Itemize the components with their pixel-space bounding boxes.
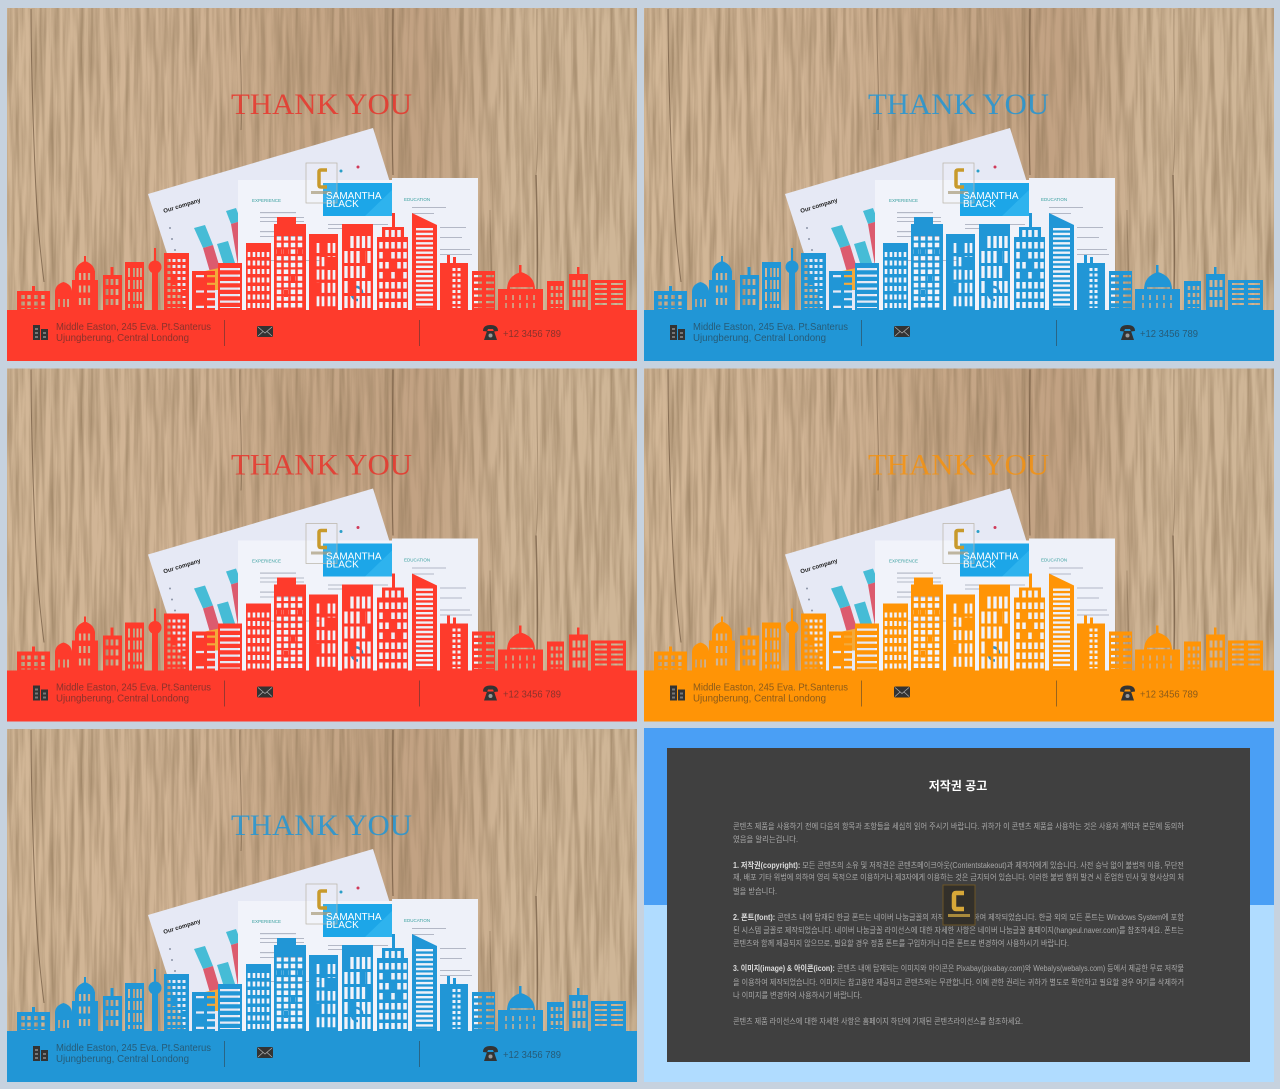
title: THANK YOU (231, 809, 412, 842)
address (693, 321, 848, 344)
document text: SAMANTHA (326, 552, 382, 562)
dark notice panel (667, 748, 1250, 1062)
address: Ujungberung, Central Londong (56, 1053, 189, 1065)
phone number: +12 3456 789 (503, 1049, 561, 1061)
divider (1056, 680, 1057, 706)
document text: EXPERIENCE (889, 198, 918, 203)
slide 6: copyright notice (644, 728, 1274, 1082)
document text: EXPERIENCE (252, 919, 281, 924)
city skyline and footer band (7, 213, 637, 361)
title: THANK YOU (231, 448, 412, 482)
icon: envelope (257, 326, 273, 337)
icon: envelope (894, 326, 910, 337)
paragraph 1: copyright: 벌을 받습니다. (733, 886, 777, 896)
divider (224, 1041, 225, 1067)
divider (419, 1041, 420, 1067)
document text: BLACK (963, 560, 996, 570)
document text: Our company (163, 198, 202, 215)
document text (163, 912, 430, 936)
paragraph 2: font: 된 시스템 글꼴로 제작되었습니다. 네이버 나눔글꼴 라이선스에 대한 자세한 사항은 네이버 나눔글꼴 홈페이지(hangeul.naver.com)를 참조하세요. 폰트는 (733, 925, 1184, 935)
background top blue (644, 728, 1274, 905)
divider (419, 680, 420, 706)
paragraph 1: copyright: 1. 저작권(copyright): 모든 콘텐츠의 소유 및 저작권은 콘텐츠메이크아웃(Contentstakeout)과 제작자에게 있습니다. 사전 승낙 없이 불법적 이용, 무단전 (733, 860, 1184, 870)
background bottom light blue (644, 905, 1274, 1082)
address: Middle Easton, 245 Eva. Pt.Santerus (56, 1042, 211, 1054)
intro paragraph (733, 821, 1185, 844)
document text (800, 552, 1067, 575)
document text: BLACK (326, 560, 359, 570)
address (56, 682, 211, 704)
title: THANK YOU (231, 88, 412, 121)
document text (800, 191, 1067, 215)
city skyline and footer band (7, 934, 637, 1082)
notice heading: 저작권 공고 (929, 778, 987, 793)
paragraph 3: image and icon: 나 이미지를 변경하여 사용하시기 바랍니다. (733, 990, 862, 1000)
document text: Our company (800, 198, 839, 215)
phone number: +12 3456 789 (1140, 328, 1198, 340)
document text: EDUCATION (404, 197, 430, 202)
document text: BLACK (326, 199, 359, 210)
icon: building (33, 1046, 48, 1061)
address: Middle Easton, 245 Eva. Pt.Santerus (693, 321, 848, 333)
slide 3: red thank you (7, 368, 637, 722)
document text (163, 191, 430, 215)
paragraph 2: font (733, 912, 1185, 948)
slide 1: red thank you (7, 8, 637, 361)
address: Ujungberung, Central Londong (693, 692, 826, 704)
phone number: +12 3456 789 (1140, 688, 1198, 700)
document text: EDUCATION (404, 918, 430, 923)
divider (861, 320, 862, 346)
document text: EXPERIENCE (889, 558, 918, 564)
document text: SAMANTHA (963, 552, 1019, 562)
intro paragraph: 콘텐츠 제품을 사용하기 전에 다음의 항목과 조항들을 세심히 읽어 주시기 바랍니다. 귀하가 이 콘텐츠 제품을 사용하는 것은 사용자 계약과 본문에 동의하 (733, 821, 1185, 831)
document text: BLACK (963, 199, 996, 210)
document text: EXPERIENCE (252, 558, 281, 564)
icon: telephone (483, 1046, 498, 1061)
icon: telephone (483, 325, 498, 340)
title: THANK YOU (868, 448, 1049, 482)
icon: building (670, 686, 685, 700)
icon: envelope (257, 1047, 273, 1058)
icon: telephone (1120, 686, 1135, 700)
address (693, 682, 848, 704)
paragraph 3: image and icon: 3. 이미지(image) & 아이콘(icon): 콘텐츠 내에 탑재되는 이미지와 아이콘은 Pixabay(pixabay.com)와 Webalys(webalys.com) 등에서 제공한 무료 저작물 (733, 963, 1184, 973)
document text: BLACK (326, 920, 359, 931)
wood background with documents (644, 368, 1274, 672)
icon: telephone (483, 686, 498, 700)
document text: Our company (800, 558, 839, 575)
icon: envelope (894, 686, 910, 698)
icon: envelope (257, 686, 273, 698)
document text: EDUCATION (1041, 197, 1067, 202)
divider (1056, 320, 1057, 346)
document text: EDUCATION (1041, 558, 1067, 562)
document text: Our company (163, 558, 202, 575)
icon: building (33, 686, 48, 700)
document text: SAMANTHA (326, 912, 382, 923)
divider (224, 680, 225, 706)
divider (861, 680, 862, 706)
address: Ujungberung, Central Londong (56, 692, 189, 704)
wood background with documents (7, 8, 637, 312)
slide 5: blue thank you (7, 729, 637, 1082)
paragraph 3: image and icon (733, 963, 1184, 1000)
address: Middle Easton, 245 Eva. Pt.Santerus (693, 682, 848, 694)
icon: building (33, 325, 48, 340)
address (56, 1042, 211, 1065)
document text: EDUCATION (404, 558, 430, 562)
address (56, 321, 211, 344)
document text: Our company (163, 919, 202, 936)
address: Middle Easton, 245 Eva. Pt.Santerus (56, 321, 211, 333)
document text: SAMANTHA (963, 191, 1019, 202)
document text: SAMANTHA (326, 191, 382, 202)
wood background with documents (7, 368, 637, 672)
slide 4: orange thank you (644, 368, 1274, 722)
paragraph 2: font: 콘텐츠와 함께 제공되지 않으므로, 필요할 경우 정품 폰트를 구입하거나 다른 폰트로 변경하여 사용하시기 바랍니다. (733, 938, 1069, 948)
city skyline and footer band (644, 213, 1274, 361)
slide 2: blue thank you (644, 8, 1274, 361)
intro paragraph: 였음을 알리는겁니다. (733, 834, 798, 844)
city skyline and footer band (644, 574, 1274, 722)
address: Ujungberung, Central Londong (56, 332, 189, 344)
city skyline and footer band (7, 574, 637, 722)
wood background with documents (644, 8, 1274, 312)
paragraph 2: font: 2. 폰트(font): 콘텐츠 내에 탑재된 한글 폰트는 네이버 나눔글꼴의 저작권을 이용하여 제작되었습니다. 한글 외의 모든 폰트는 Windows System에 포함 (733, 912, 1185, 922)
title: THANK YOU (868, 88, 1049, 121)
address: Middle Easton, 245 Eva. Pt.Santerus (56, 682, 211, 694)
divider (224, 320, 225, 346)
icon: building (670, 325, 685, 340)
paragraph 1: copyright: 재, 배포 기타 위법에 의하여 영리 목적으로 이용하거나 제3자에게 이용하는 것은 금지되어 있습니다. 이러한 불법 행위 발견 시 준엄한 민사 및 형사상의 처 (733, 872, 1184, 882)
wood background with documents (7, 729, 637, 1033)
phone number: +12 3456 789 (503, 328, 561, 340)
document text: EXPERIENCE (252, 198, 281, 203)
logo badge (943, 885, 975, 925)
paragraph 3: image and icon: 을 이용하여 제작되었습니다. 이미지는 참고용만 제공되고 콘텐츠와는 무관합니다. 이에 관한 권리는 귀하가 별도로 확인하고 필요할 경우 여기를 삭제하거 (733, 977, 1184, 987)
closing line: 콘텐츠 제품 라이선스에 대한 자세한 사항은 홈페이지 하단에 기재된 콘텐츠라이선스를 참조하세요. (733, 1016, 1023, 1026)
divider (419, 320, 420, 346)
paragraph 1: copyright (733, 860, 1184, 896)
icon: telephone (1120, 325, 1135, 340)
phone number: +12 3456 789 (503, 688, 561, 700)
document text (163, 552, 430, 575)
address: Ujungberung, Central Londong (693, 332, 826, 344)
